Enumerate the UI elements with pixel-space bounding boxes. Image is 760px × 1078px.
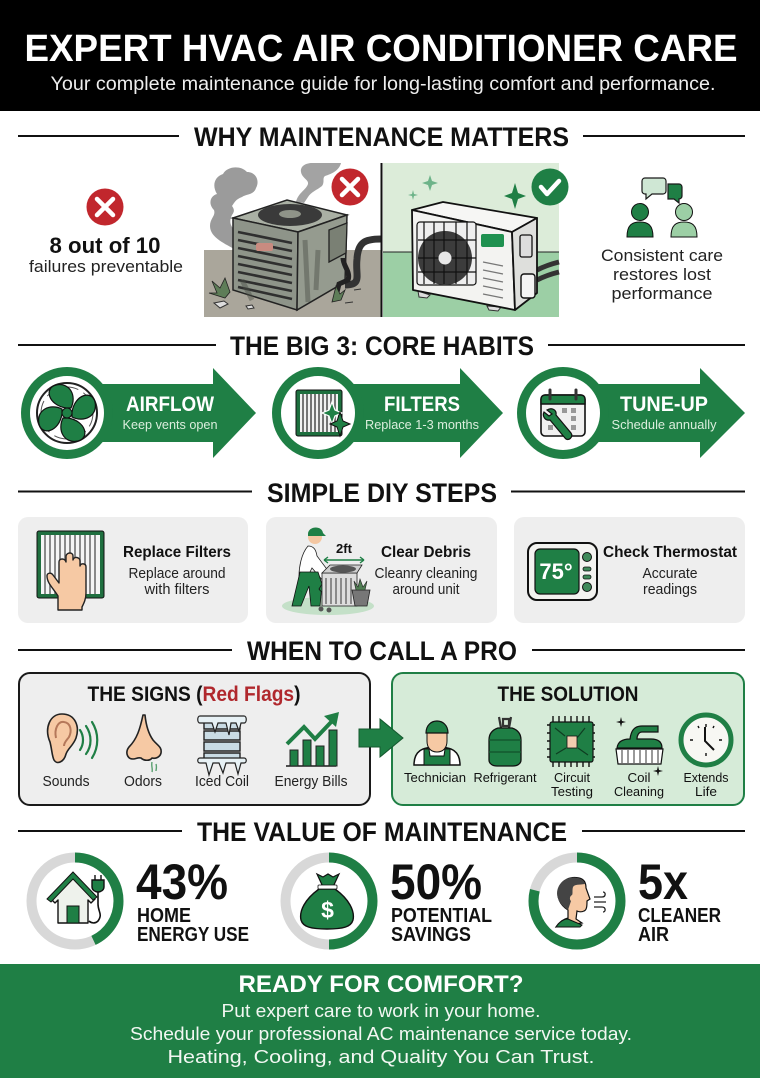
footer text: Heating, Cooling, and Quality You Can Trust. xyxy=(168,1047,594,1067)
icon: people talking xyxy=(627,178,697,237)
icon: coil cleaning brush xyxy=(616,717,663,776)
panel: the solution: Life xyxy=(695,784,717,799)
callout: failures preventable: 8 out of 10 xyxy=(50,233,160,258)
icon: thermostat: 75° xyxy=(539,559,573,584)
habit arrow: tune-up: TUNE-UP xyxy=(620,393,708,416)
card: check thermostat: readings xyxy=(643,582,697,598)
stat: 50% potential savings xyxy=(286,854,492,946)
callout: failures preventable xyxy=(29,188,183,276)
panel: the solution: Refrigerant xyxy=(474,770,537,785)
stat: 50% potential savings: POTENTIAL xyxy=(391,905,492,927)
panel: the signs: Sounds xyxy=(42,774,90,790)
card: check thermostat xyxy=(514,517,745,623)
panel: the solution xyxy=(392,673,744,805)
callout: failures preventable: failures preventable xyxy=(29,257,183,276)
icon: person breathing clean air xyxy=(556,877,606,927)
card: replace filters: Replace around xyxy=(128,566,226,582)
neglected outdoor unit xyxy=(204,163,381,317)
panel: the solution: Coil xyxy=(628,770,651,785)
stat value: 50% xyxy=(390,854,482,910)
heading: simple diy steps: SIMPLE DIY STEPS xyxy=(267,478,497,508)
icon: circuit chip xyxy=(547,716,595,767)
habit arrow: airflow: AIRFLOW xyxy=(126,393,214,416)
card: check thermostat: Check Thermostat xyxy=(603,544,738,561)
icon: rising energy bills chart xyxy=(286,712,339,766)
callout: consistent care: performance xyxy=(612,284,712,303)
icon: money bag xyxy=(301,874,353,929)
icon: technician xyxy=(414,721,460,765)
icon: refrigerant tank xyxy=(489,717,521,766)
icon: iced coil xyxy=(198,716,246,775)
card: clear debris xyxy=(266,517,497,623)
stat: 5x cleaner air xyxy=(534,854,721,946)
stat value: 43% xyxy=(136,854,228,910)
habit arrow: filters: Replace 1-3 months xyxy=(365,417,479,432)
maintained outdoor unit xyxy=(383,163,559,317)
panel: the solution: Cleaning xyxy=(614,784,664,799)
habit arrow: filters: FILTERS xyxy=(384,393,460,416)
stat value: 5x xyxy=(638,854,688,910)
icon: nose xyxy=(127,715,161,772)
habit arrow: airflow xyxy=(21,367,256,459)
card: replace filters: Replace Filters xyxy=(123,544,231,561)
icon: fan xyxy=(37,383,97,443)
icon: clock xyxy=(681,715,731,765)
icon: worker clearing debris around unit xyxy=(282,527,374,615)
panel: the signs xyxy=(19,673,370,805)
panel: the signs: Iced Coil xyxy=(195,774,249,790)
stat: 50% potential savings: SAVINGS xyxy=(391,924,471,946)
panel: the signs: Odors xyxy=(124,774,162,790)
callout: consistent care: restores lost xyxy=(613,265,711,284)
icon: ear xyxy=(48,714,97,762)
badge: good xyxy=(532,168,568,206)
callout: consistent care xyxy=(601,178,723,303)
heading: when to call a pro: WHEN TO CALL A PRO xyxy=(247,636,517,666)
panel: the solution: Testing xyxy=(551,784,593,799)
stat: 43% home energy use: ENERGY USE xyxy=(137,924,249,946)
card: clear debris: around unit xyxy=(392,582,460,598)
header banner xyxy=(0,0,760,111)
arrow: signs to solution xyxy=(359,719,403,757)
panel: the signs: Energy Bills xyxy=(274,774,348,790)
footer heading: READY FOR COMFORT? xyxy=(238,971,524,998)
card: clear debris: Cleanry cleaning xyxy=(374,566,478,582)
heading: why maintenance matters: WHY MAINTENANCE MATTERS xyxy=(194,122,569,152)
callout: consistent care: Consistent care xyxy=(601,246,723,265)
habit arrow: airflow: Keep vents open xyxy=(122,417,218,432)
card: replace filters xyxy=(18,517,248,623)
footer call to action xyxy=(0,964,760,1078)
habit arrow: tune-up xyxy=(517,367,745,459)
icon: thermostat xyxy=(528,543,597,600)
habit arrow: filters xyxy=(272,367,503,459)
title: EXPERT HVAC AIR CONDITIONER CARE xyxy=(24,28,738,70)
footer text: Put expert care to work in your home. xyxy=(222,1001,540,1021)
card: replace filters: with filters xyxy=(143,582,210,598)
icon: money bag: $ xyxy=(321,897,334,923)
heading: the value of maintenance: THE VALUE OF MAINTENANCE xyxy=(197,817,567,847)
panel heading: the solution: THE SOLUTION xyxy=(498,683,638,706)
badge: bad xyxy=(332,168,368,206)
footer text xyxy=(130,1001,632,1067)
card: clear debris: Clear Debris xyxy=(381,544,471,561)
icon: clean filter xyxy=(296,390,350,436)
stat: 5x cleaner air: AIR xyxy=(638,924,669,946)
panel: the solution: Technician xyxy=(404,770,466,785)
stat: 43% home energy use xyxy=(32,854,249,946)
card: check thermostat: Accurate xyxy=(642,566,698,582)
icon: calendar and wrench xyxy=(541,390,585,439)
heading: the big 3: THE BIG 3: CORE HABITS xyxy=(230,331,534,361)
panel: the solution: Circuit xyxy=(554,770,590,785)
icon: worker clearing debris around unit: 2ft xyxy=(336,541,353,556)
icon: filter and hand xyxy=(37,531,104,610)
illustration: neglected unit vs maintained unit xyxy=(204,163,568,317)
panel: the solution: Extends xyxy=(684,770,729,785)
habit arrow: tune-up: Schedule annually xyxy=(612,417,717,432)
subtitle: Your complete maintenance guide for long-lasting comfort and performance. xyxy=(50,73,716,95)
stat: 43% home energy use: HOME xyxy=(137,905,191,927)
icon: house and plug xyxy=(47,872,104,923)
stat: 5x cleaner air: CLEANER xyxy=(638,905,721,927)
footer text: Schedule your professional AC maintenance service today. xyxy=(130,1024,632,1044)
panel heading: the signs: THE SIGNS (Red Flags) xyxy=(88,683,300,706)
